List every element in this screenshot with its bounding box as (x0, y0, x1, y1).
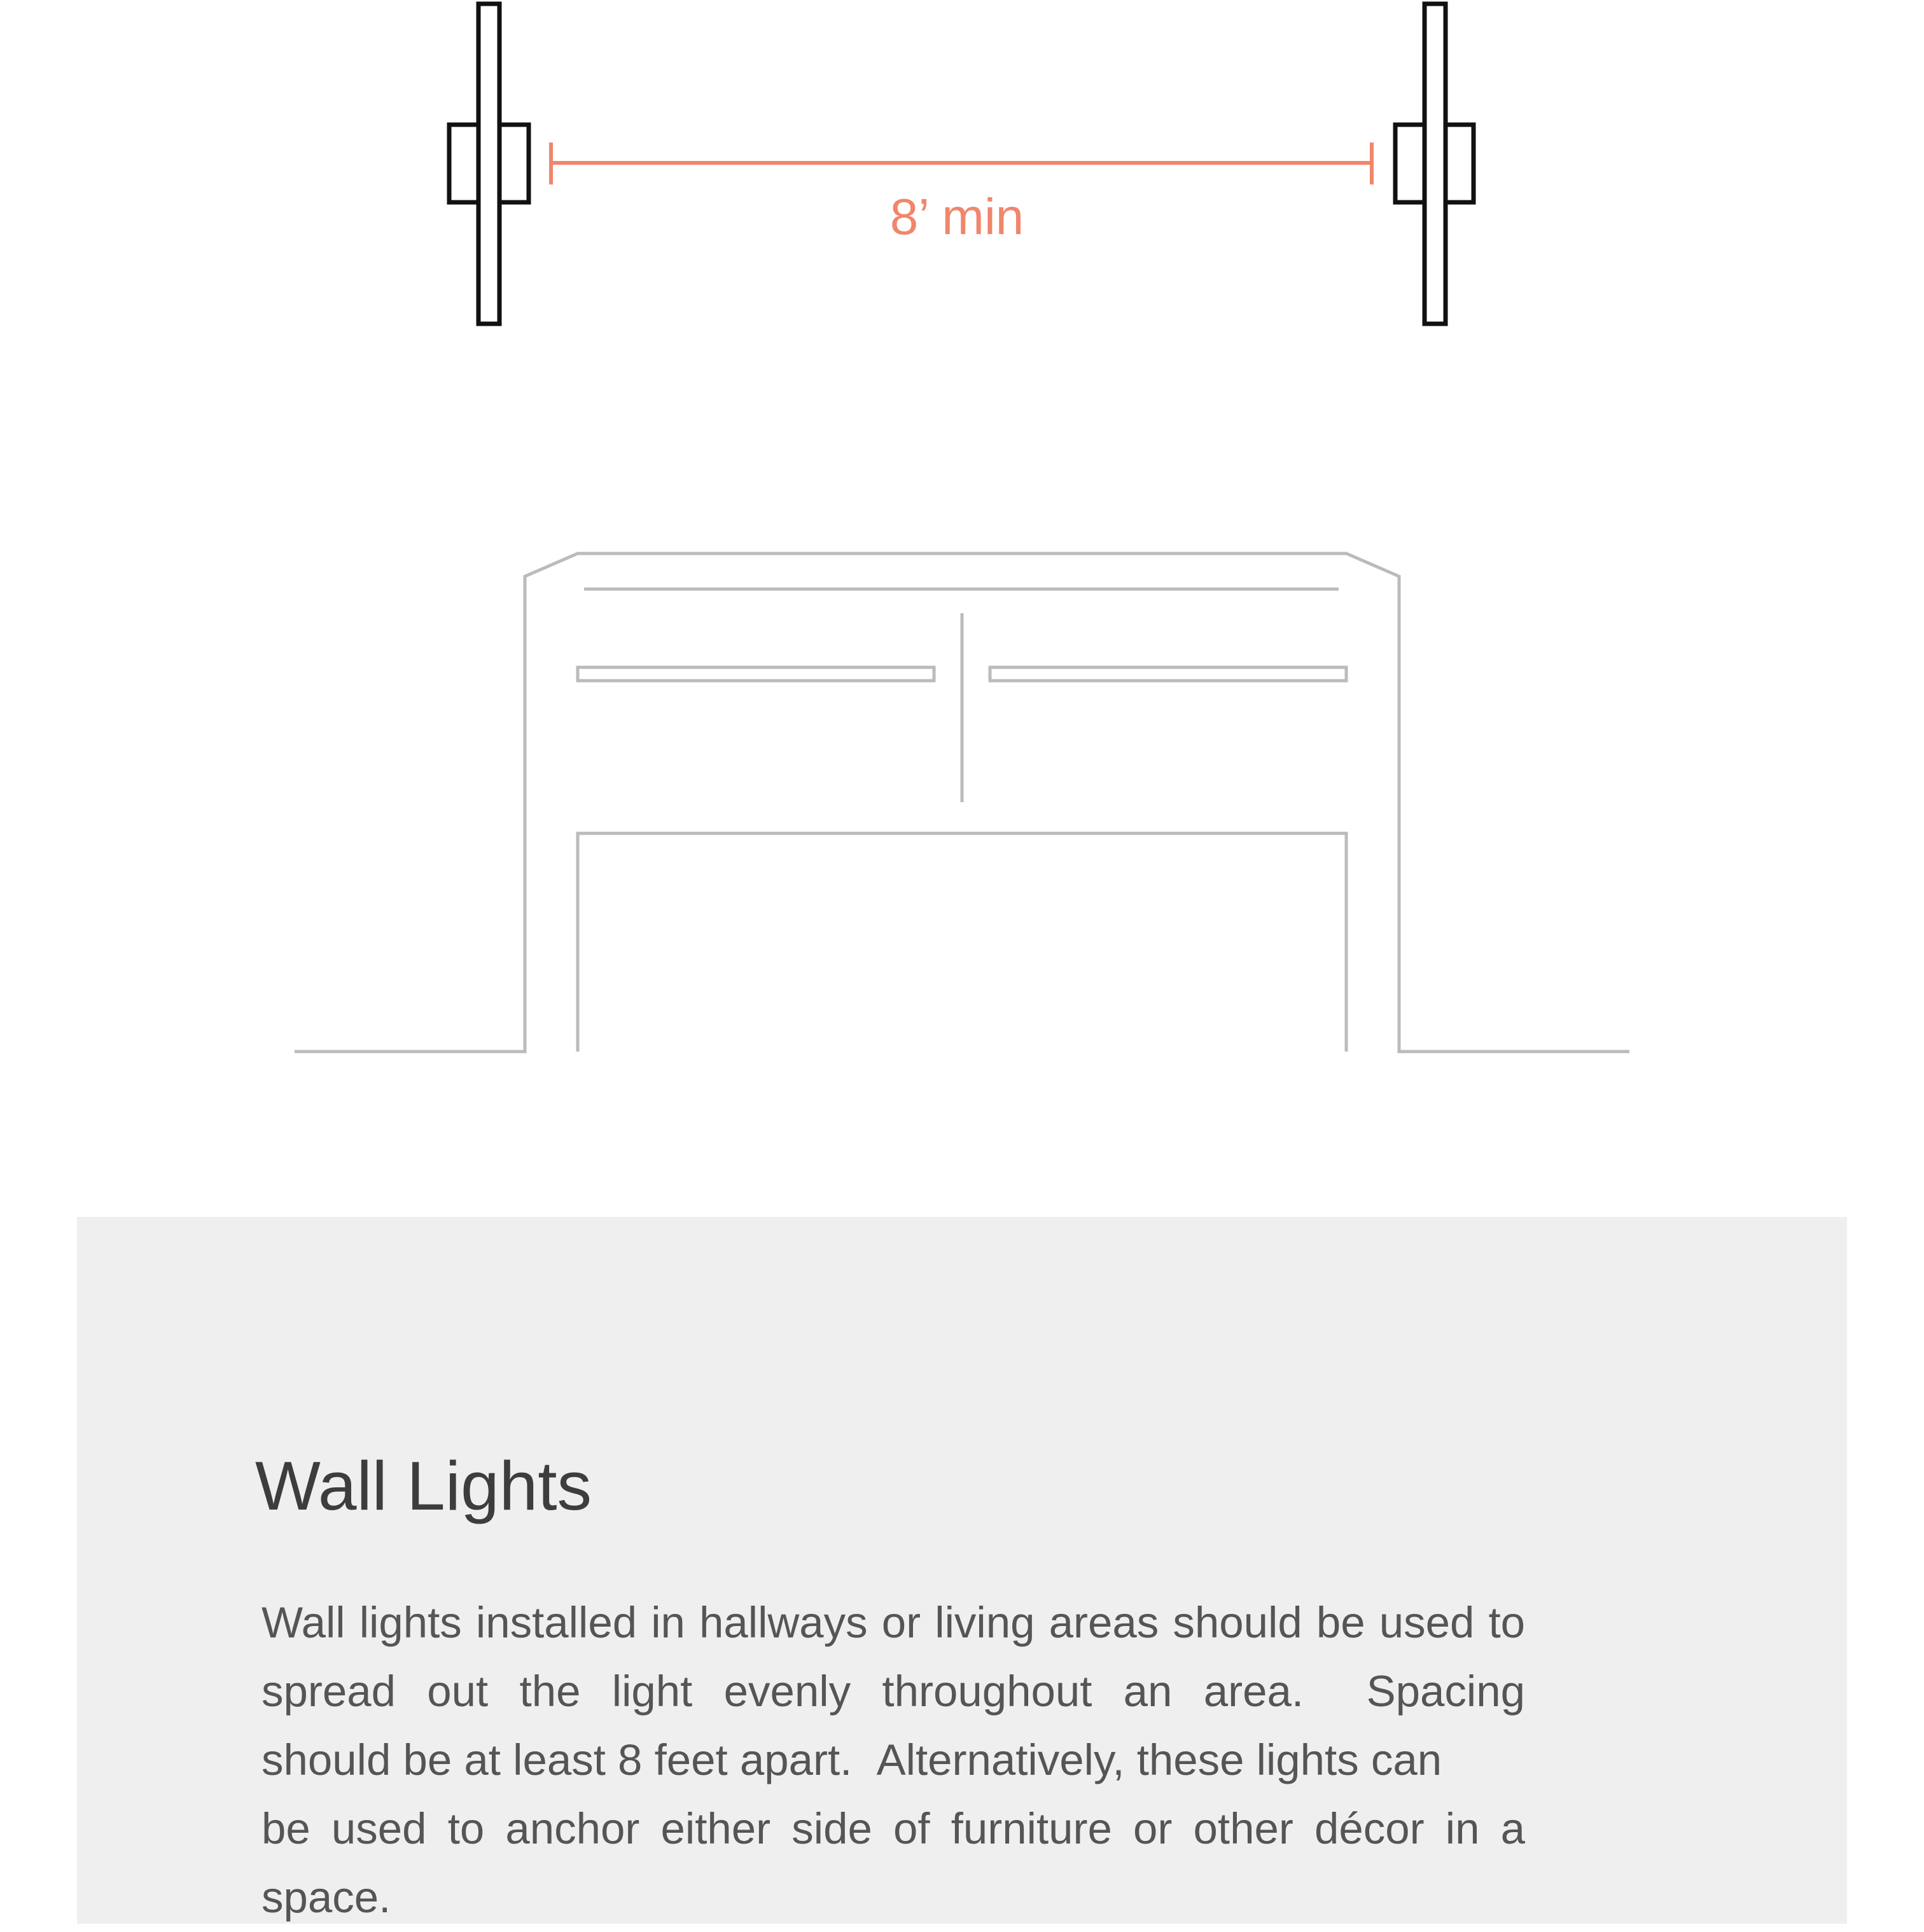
text block: space. (261, 1873, 391, 1922)
heading: Wall Lights (255, 1447, 592, 1525)
icon: right wall light (1395, 4, 1474, 324)
text block: should be at least 8 feet apart. Alternatively, these lights can (261, 1735, 1442, 1784)
icon: left wall light (449, 4, 529, 324)
furniture: console/fireplace outline (295, 553, 1629, 1052)
dimension arrow: 8' min: 8’ min (890, 188, 1024, 245)
panel: description (77, 1217, 1847, 1924)
text block: Wall lights installed in hallways or living areas should be used to (261, 1598, 1525, 1647)
text block (261, 1598, 1525, 1922)
text block: be used to anchor either side of furniture or other décor in a (261, 1804, 1525, 1853)
diagram: wall lights and dimension (295, 1, 1629, 1053)
text block: spread out the light evenly throughout an area. Spacing (261, 1667, 1525, 1716)
